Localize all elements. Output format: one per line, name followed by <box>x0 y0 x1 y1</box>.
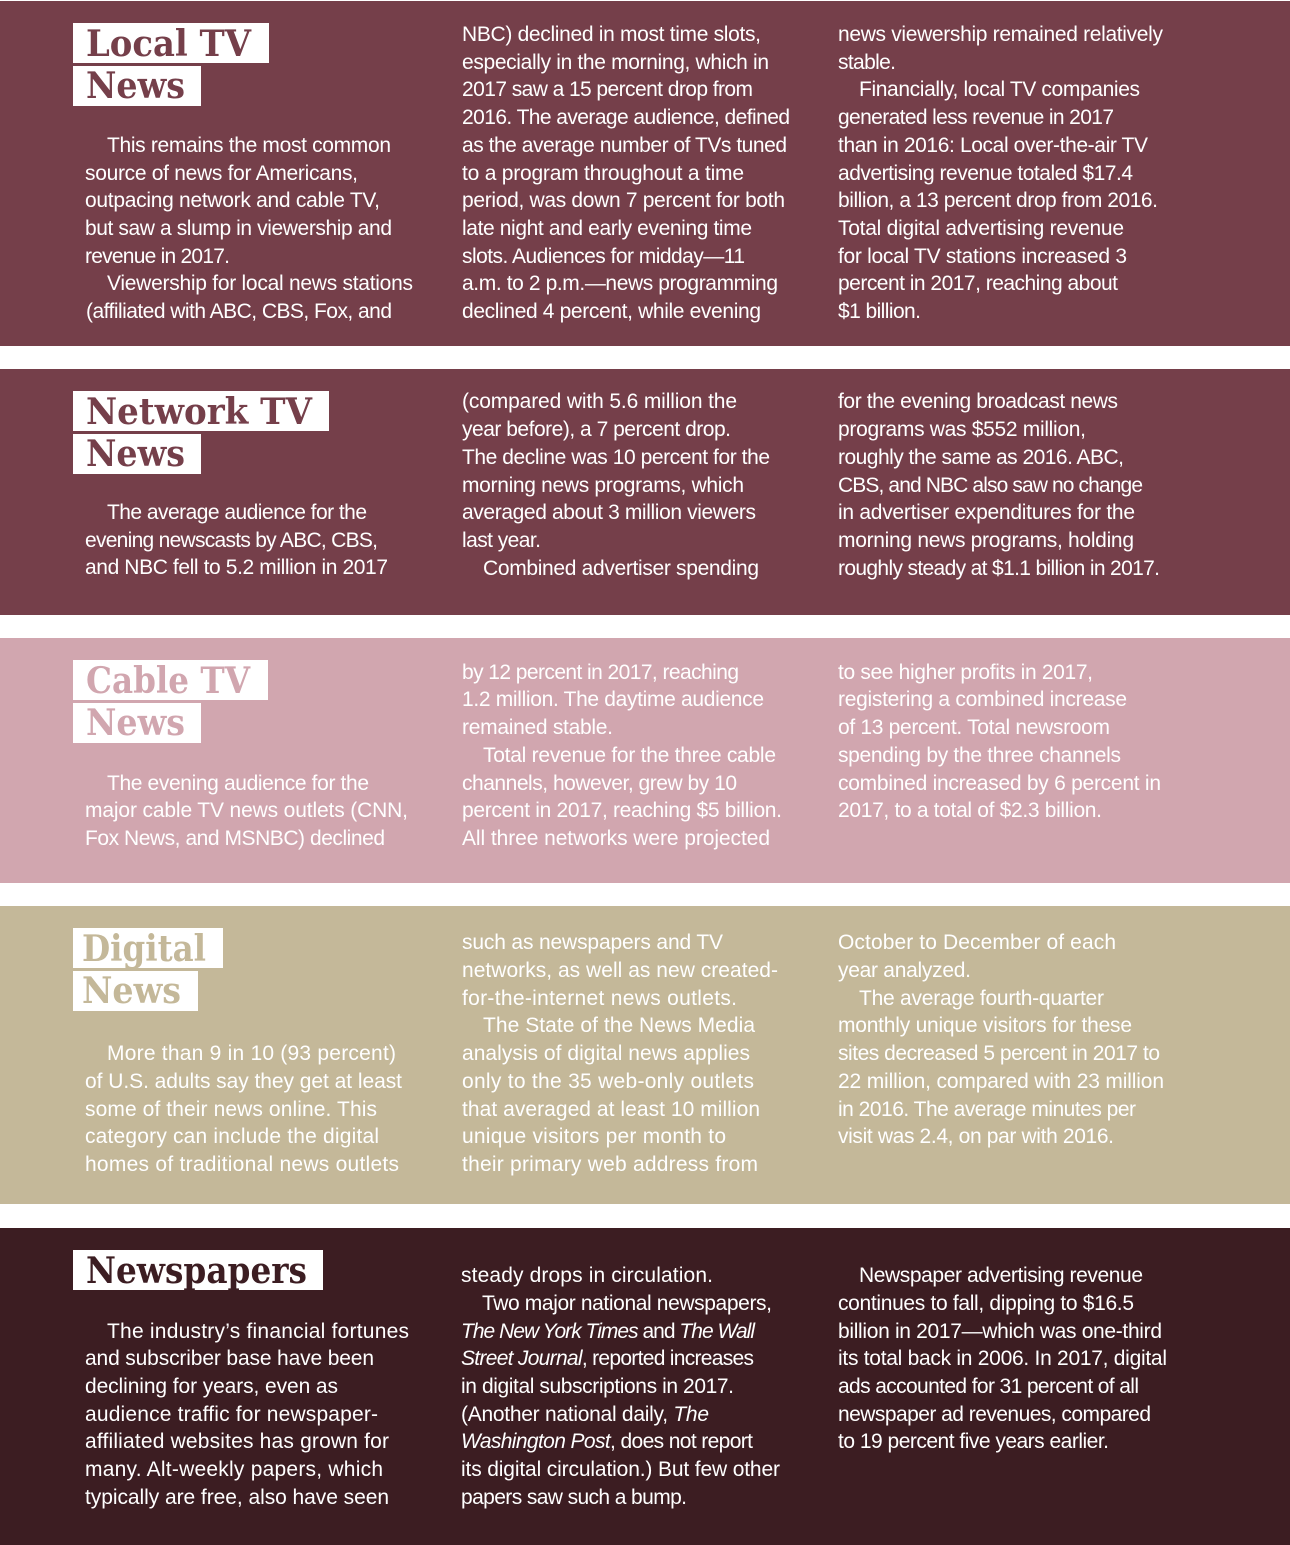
text column 1: local TV <box>85 134 413 323</box>
text column 1: digital: of U.S. adults say they get at least <box>85 1070 402 1093</box>
text column 2: network TV: averaged about 3 million viewers <box>462 501 756 524</box>
text column 3: newspapers <box>838 1264 1167 1453</box>
text column 2: newspapers: Two major national newspapers, <box>482 1292 772 1315</box>
text column 2: local TV: late night and early evening time <box>462 217 752 240</box>
text column 3: local TV: advertising revenue totaled $17.4 <box>838 162 1133 185</box>
text column 2: digital: that averaged at least 10 million <box>462 1098 760 1121</box>
text column 3: network TV: morning news programs, holding <box>838 529 1134 552</box>
text column 2: newspapers: (Another national daily, The <box>461 1403 709 1426</box>
text column 3: cable TV <box>838 661 1161 822</box>
text column 1: digital: category can include the digital <box>85 1125 379 1148</box>
text column 1: newspapers: declining for years, even as <box>85 1375 338 1398</box>
text column 2: cable TV: Total revenue for the three cable <box>483 744 776 767</box>
text column 3: local TV: stable. <box>838 51 896 74</box>
text column 3: newspapers: newspaper ad revenues, compared <box>838 1403 1151 1426</box>
heading: network TV news <box>73 391 329 475</box>
text column 1: digital <box>85 1042 402 1176</box>
text column 1: newspapers: audience traffic for newspaper- <box>85 1403 378 1426</box>
text column 3: local TV: $1 billion. <box>838 300 921 323</box>
text column 3: cable TV: registering a combined increase <box>838 688 1127 711</box>
text column 1: local TV: outpacing network and cable TV, <box>85 189 380 212</box>
text column 3: local TV: for local TV stations increased 3 <box>838 245 1127 268</box>
text column 3: local TV: news viewership remained relatively <box>838 23 1164 46</box>
text column 3: local TV: than in 2016: Local over-the-air TV <box>838 134 1148 157</box>
text column 3: network TV: CBS, and NBC also saw no change <box>838 474 1143 497</box>
text column 2: digital: their primary web address from <box>462 1153 758 1176</box>
text column 3: cable TV: of 13 percent. Total newsroom <box>838 716 1110 739</box>
text column 1: network TV: The average audience for the <box>107 501 367 524</box>
text column 2: local TV: especially in the morning, which in <box>462 51 769 74</box>
text column 2: digital: analysis of digital news applies <box>462 1042 750 1065</box>
text column 2: digital: for-the-internet news outlets. <box>462 987 737 1010</box>
text column 2: newspapers <box>461 1264 780 1509</box>
heading: network TV news: Network TV <box>86 391 313 433</box>
text column 2: local TV: 2017 saw a 15 percent drop from <box>462 78 753 101</box>
text column 3: digital: sites decreased 5 percent in 2017 to <box>838 1042 1160 1065</box>
text column 1: cable TV: Fox News, and MSNBC) declined <box>85 827 385 850</box>
text column 3: digital: 22 million, compared with 23 million <box>838 1070 1164 1093</box>
text column 3: newspapers: Newspaper advertising revenue <box>859 1264 1143 1287</box>
text column 2: digital: only to the 35 web-only outlets <box>462 1070 754 1093</box>
heading: local TV news: Local TV <box>86 23 252 65</box>
text column 3: digital <box>838 931 1164 1148</box>
text column 3: cable TV: 2017, to a total of $2.3 billion. <box>838 799 1102 822</box>
text column 3: local TV: percent in 2017, reaching about <box>838 272 1118 295</box>
text column 3: local TV: Financially, local TV companies <box>859 78 1140 101</box>
text column 2: network TV: morning news programs, which <box>462 474 744 497</box>
text column 2: digital <box>462 931 778 1176</box>
text column 2: network TV: (compared with 5.6 million the <box>462 390 737 413</box>
text column 2: newspapers: The New York Times and The Wall <box>461 1320 756 1343</box>
text column 3: newspapers: continues to fall, dipping to $16.5 <box>838 1292 1134 1315</box>
panel: network TV news <box>0 369 1290 615</box>
text column 2: digital: unique visitors per month to <box>462 1125 726 1148</box>
text column 2: digital: networks, as well as new created- <box>462 959 778 982</box>
text column 3: newspapers: to 19 percent five years earlier. <box>838 1430 1109 1453</box>
text column 1: newspapers: typically are free, also have seen <box>85 1486 389 1509</box>
text column 3: digital: in 2016. The average minutes per <box>838 1098 1136 1121</box>
text column 1: newspapers: many. Alt-weekly papers, which <box>85 1458 383 1481</box>
text column 3: digital: October to December of each <box>838 931 1116 954</box>
text column 2: network TV <box>462 390 770 580</box>
text column 2: cable TV: channels, however, grew by 10 <box>462 772 737 795</box>
text column 2: local TV: slots. Audiences for midday—11 <box>462 245 745 268</box>
text column 2: newspapers: Street Journal, reported increases <box>461 1347 754 1370</box>
text column 3: network TV: in advertiser expenditures for the <box>838 501 1135 524</box>
text column 1: cable TV <box>85 772 408 850</box>
text column 1: local TV: revenue in 2017. <box>85 245 230 268</box>
text column 2: digital: such as newspapers and TV <box>462 931 723 954</box>
text column 3: network TV <box>838 390 1160 580</box>
text column 1: local TV: (affiliated with ABC, CBS, Fox, and <box>86 300 392 323</box>
text column 3: newspapers: billion in 2017—which was one-third <box>838 1320 1162 1343</box>
text column 1: digital: homes of traditional news outlets <box>85 1153 399 1176</box>
text column 3: digital: monthly unique visitors for these <box>838 1014 1132 1037</box>
text column 3: local TV: billion, a 13 percent drop from 2016. <box>838 189 1158 212</box>
text column 2: local TV: NBC) declined in most time slots, <box>462 23 761 46</box>
text column 2: local TV: to a program throughout a time <box>462 162 744 185</box>
text column 2: network TV: Combined advertiser spending <box>483 557 759 580</box>
text column 3: network TV: programs was $552 million, <box>838 418 1086 441</box>
text column 2: newspapers: in digital subscriptions in 2017. <box>461 1375 734 1398</box>
text column 2: local TV: period, was down 7 percent for both <box>462 189 785 212</box>
text column 2: cable TV: All three networks were projected <box>462 827 770 850</box>
text column 1: digital: some of their news online. This <box>85 1098 377 1121</box>
heading: cable TV news <box>73 660 268 744</box>
text column 2: digital: The State of the News Media <box>483 1014 755 1037</box>
text column 2: newspapers: steady drops in circulation. <box>461 1264 713 1287</box>
text column 3: local TV: Total digital advertising revenue <box>838 217 1124 240</box>
text column 2: network TV: The decline was 10 percent for the <box>462 446 770 469</box>
text column 3: network TV: roughly the same as 2016. ABC, <box>838 446 1124 469</box>
text column 2: cable TV: 1.2 million. The daytime audience <box>462 688 764 711</box>
text column 3: newspapers: its total back in 2006. In 2017, digital <box>838 1347 1167 1370</box>
text column 2: local TV: as the average number of TVs tuned <box>462 134 787 157</box>
text column 1: newspapers <box>85 1320 409 1509</box>
text column 2: cable TV: percent in 2017, reaching $5 billion. <box>462 799 782 822</box>
heading: cable TV news: News <box>86 702 185 744</box>
text column 1: cable TV: major cable TV news outlets (CNN, <box>85 799 408 822</box>
text column 2: local TV: declined 4 percent, while evening <box>462 300 761 323</box>
panel: newspapers <box>0 1228 1290 1545</box>
heading: local TV news: News <box>86 65 185 107</box>
text column 1: newspapers: affiliated websites has grown for <box>85 1430 389 1453</box>
text column 1: local TV: but saw a slump in viewership and <box>85 217 392 240</box>
text column 1: newspapers: The industry’s financial fortunes <box>107 1320 409 1343</box>
text column 2: network TV: last year. <box>462 529 541 552</box>
text column 2: local TV <box>462 23 790 323</box>
text column 1: local TV: This remains the most common <box>107 134 391 157</box>
text column 3: local TV <box>838 23 1164 323</box>
panel: cable TV news <box>0 638 1290 883</box>
text column 2: local TV: a.m. to 2 p.m.—news programming <box>462 272 778 295</box>
text column 2: local TV: 2016. The average audience, defined <box>462 106 790 129</box>
panel: digital news <box>0 906 1290 1204</box>
heading: digital news: News <box>82 970 181 1012</box>
heading: newspapers: Newspapers <box>86 1250 307 1292</box>
text column 3: digital: The average fourth-quarter <box>859 987 1104 1010</box>
text column 3: local TV: generated less revenue in 2017 <box>838 106 1114 129</box>
text column 2: newspapers: papers saw such a bump. <box>461 1486 687 1509</box>
text column 3: digital: visit was 2.4, on par with 2016. <box>838 1125 1114 1148</box>
heading: digital news <box>73 928 223 1012</box>
text column 2: cable TV: by 12 percent in 2017, reaching <box>462 661 739 684</box>
text column 1: network TV <box>85 501 388 579</box>
heading: cable TV news: Cable TV <box>86 660 251 702</box>
text column 1: network TV: and NBC fell to 5.2 million in 2017 <box>85 556 388 579</box>
text column 3: network TV: roughly steady at $1.1 billion in 2017. <box>838 557 1160 580</box>
text column 1: network TV: evening newscasts by ABC, CBS, <box>85 529 378 552</box>
text column 1: local TV: source of news for Americans, <box>85 162 358 185</box>
text column 3: network TV: for the evening broadcast news <box>838 390 1118 413</box>
heading: network TV news: News <box>86 433 185 475</box>
text column 3: digital: year analyzed. <box>838 959 971 982</box>
text column 2: newspapers: its digital circulation.) But few other <box>461 1458 780 1481</box>
text column 2: cable TV: remained stable. <box>462 716 613 739</box>
text column 1: cable TV: The evening audience for the <box>107 772 369 795</box>
text column 2: newspapers: Washington Post, does not report <box>461 1430 753 1453</box>
text column 1: local TV: Viewership for local news stations <box>107 272 413 295</box>
text column 3: cable TV: combined increased by 6 percent in <box>838 772 1161 795</box>
heading: digital news: Digital <box>82 928 206 970</box>
text column 1: digital: More than 9 in 10 (93 percent) <box>107 1042 396 1065</box>
text column 1: newspapers: and subscriber base have been <box>85 1347 374 1370</box>
text column 3: cable TV: spending by the three channels <box>838 744 1121 767</box>
text column 3: cable TV: to see higher profits in 2017, <box>838 661 1093 684</box>
heading: local TV news <box>73 23 269 107</box>
text column 3: newspapers: ads accounted for 31 percent of all <box>838 1375 1139 1398</box>
panel: local TV news <box>0 1 1290 346</box>
text column 2: cable TV <box>462 661 782 850</box>
text column 2: network TV: year before), a 7 percent drop. <box>462 418 731 441</box>
